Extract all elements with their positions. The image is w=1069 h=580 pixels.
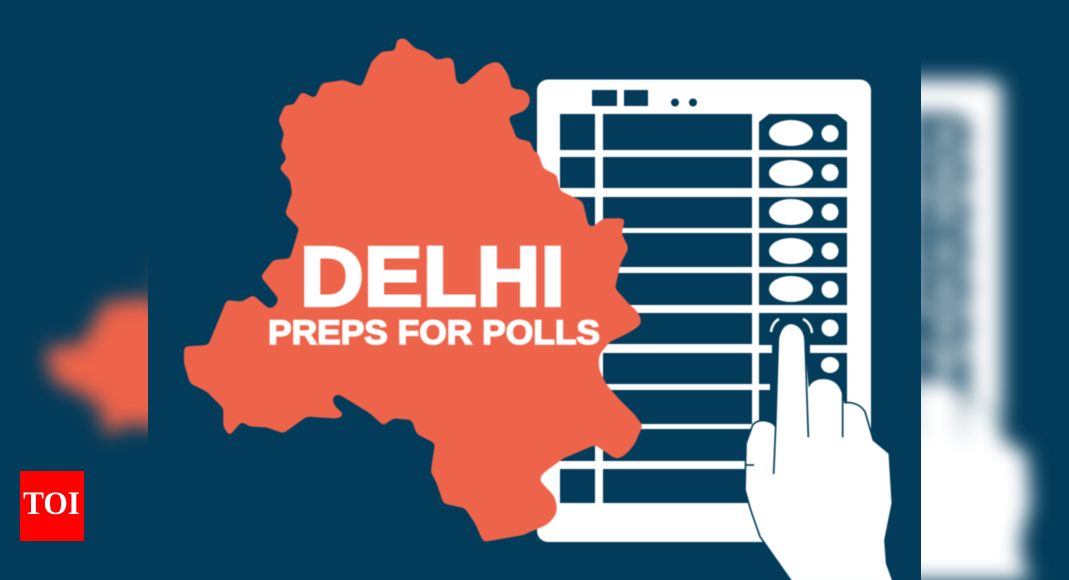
top indicators bbox=[592, 90, 697, 106]
logo text: TOI bbox=[23, 486, 80, 522]
icon: hand pressing button bbox=[745, 323, 893, 580]
button column bbox=[759, 114, 847, 444]
ovals and indicator lights bbox=[769, 120, 839, 373]
machine body bbox=[537, 80, 871, 542]
press ripple arcs bbox=[771, 319, 812, 333]
finger separators bbox=[746, 338, 843, 474]
candidate rows bbox=[560, 114, 752, 503]
subheading: PREPS FOR POLLS: PREPS FOR POLLS bbox=[268, 314, 600, 352]
heading: DELHI: DELHI bbox=[300, 230, 565, 324]
Delhi map bbox=[184, 38, 643, 542]
hand shape bbox=[745, 323, 893, 580]
voting machine panel bbox=[537, 80, 871, 542]
TOI logo bbox=[20, 471, 84, 541]
main artwork bbox=[184, 38, 893, 580]
row dividers across button column bbox=[752, 345, 867, 455]
logo background bbox=[20, 471, 84, 541]
